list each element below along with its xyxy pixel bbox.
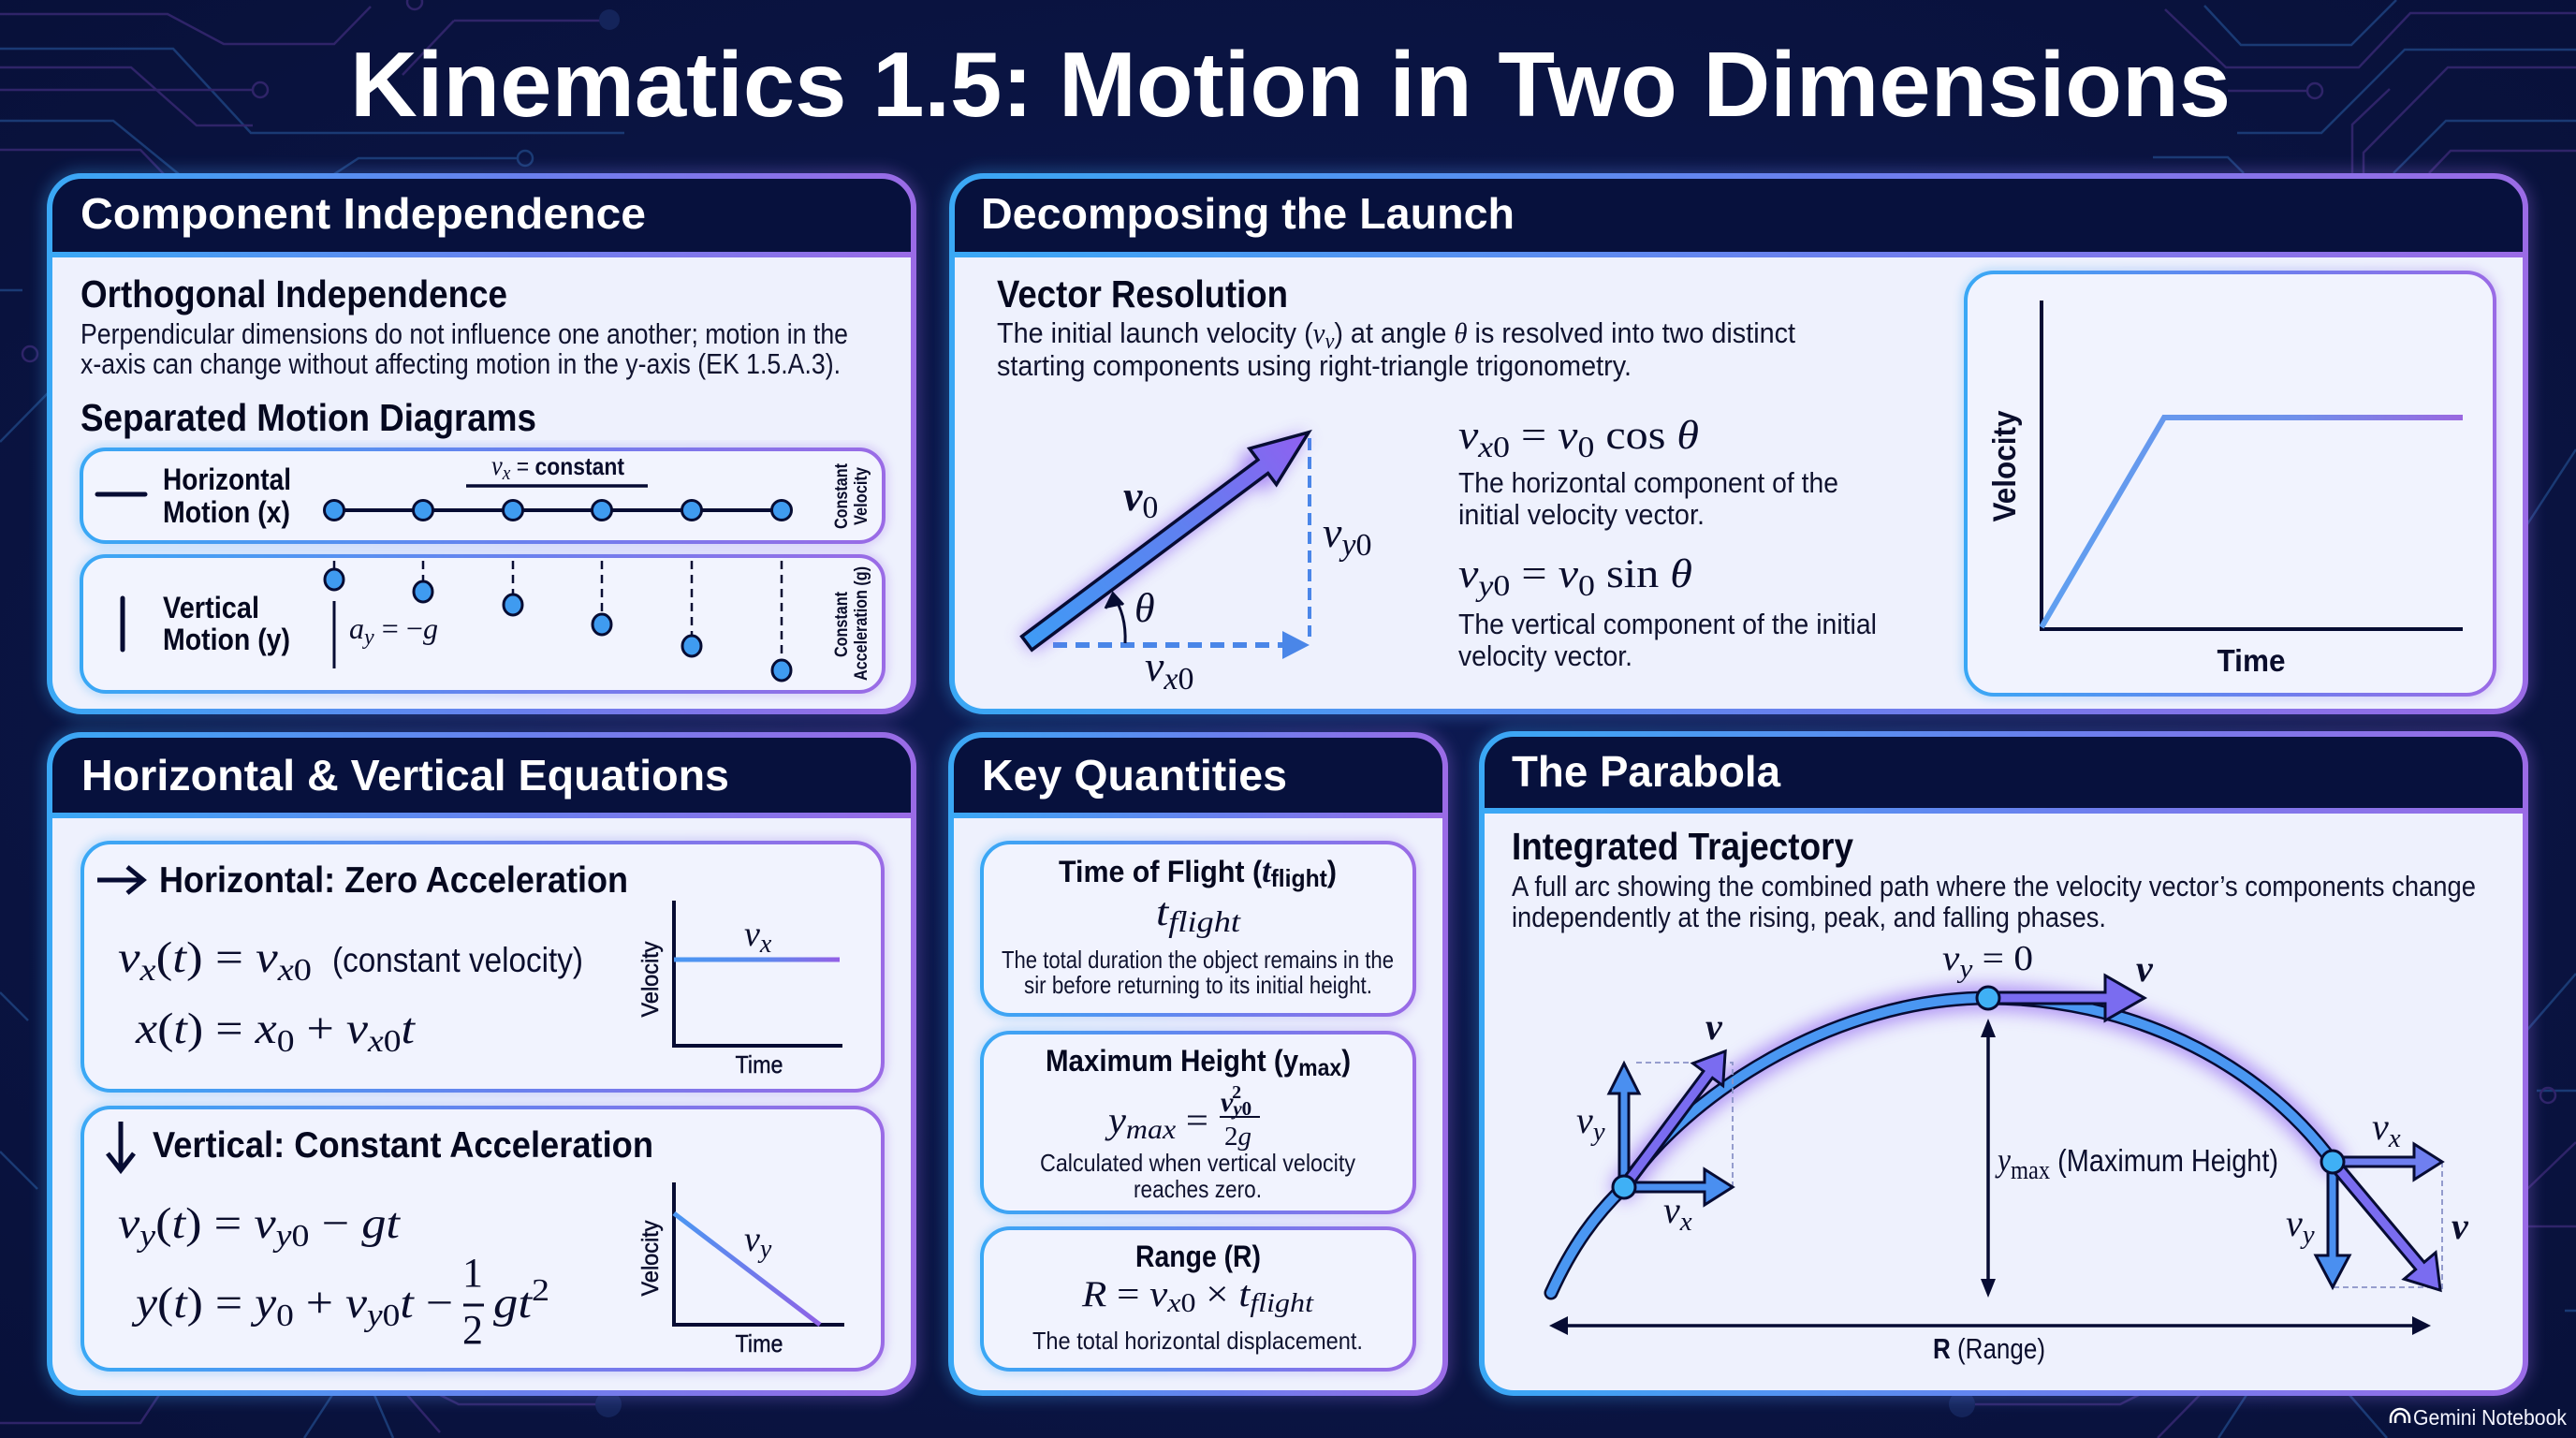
arrow: range (1549, 1316, 2431, 1335)
label: constant acceleration: Constant (832, 591, 852, 657)
label: vx falling: v (2372, 1106, 2389, 1148)
equation: y(t): y(t) = y (136, 1279, 274, 1328)
label: range: R (Range) (1933, 1332, 2045, 1365)
equation: vx(t): x (139, 953, 156, 988)
label: vy0: 0 (1356, 528, 1372, 563)
chart: constant vx: x (759, 930, 772, 959)
label: maximum height: y (1995, 1141, 2011, 1179)
equation: x(t): + (295, 1005, 346, 1053)
text block: orthogonal independence description (80, 317, 848, 380)
text block: range description: The total horizontal displacement. (1032, 1327, 1363, 1355)
equation: ay = -g: a (349, 611, 364, 645)
label: v rising: v (1705, 1005, 1723, 1048)
panel: Component Independence (50, 176, 914, 712)
chart: constant vx: v (744, 915, 760, 954)
equation: range: t (1238, 1274, 1249, 1314)
equation: vx0: 0 (1493, 430, 1510, 463)
label: horizontal motion: Motion (x) (163, 495, 290, 529)
label: v peak: v (2136, 947, 2154, 990)
label: theta: θ (1134, 585, 1155, 631)
heading: horizontal zero acceleration: Horizontal: Zero Acceleration (159, 860, 628, 901)
equation: vx(t): ( (156, 933, 172, 982)
equation: vx constant: x (502, 461, 511, 484)
equation: y(t): v (345, 1279, 365, 1328)
text block: time of flight description (1002, 946, 1394, 999)
text block: trajectory description: independently at the rising, peak, and falling phases. (1512, 901, 2106, 933)
text block: vector resolution description (997, 316, 1795, 382)
equation: vy0: v (1458, 552, 1476, 596)
heading: time of flight: ) (1327, 855, 1337, 888)
heading: vertical constant acceleration: Vertical: Constant Acceleration (153, 1125, 653, 1166)
text block: vx0 description: The horizontal component of the (1458, 466, 1838, 499)
text block: vy0 description (1458, 608, 1877, 672)
title: Kinematics 1.5: Motion in Two Dimensions (350, 33, 2231, 136)
equation: x(t): 0 (277, 1024, 295, 1059)
equation: vy0: sin (1595, 552, 1670, 596)
equation: y(t): gt (493, 1279, 528, 1328)
card: time of flight (982, 843, 1414, 1015)
text block: trajectory description (1512, 870, 2476, 933)
equation: y(t): 2 (462, 1307, 483, 1353)
text block: vx0 description (1458, 466, 1838, 531)
motion dots: increasing spacing (325, 561, 791, 681)
chart: decreasing vy: y (757, 1235, 772, 1264)
equation: vx0: v (1458, 414, 1476, 458)
heading: maximum height: Maximum Height (y (1046, 1044, 1320, 1078)
equation: vy0: 0 (1578, 568, 1595, 602)
text block: time of flight description: The total duration the object remains in the (1002, 946, 1394, 974)
label: vy = 0: = 0 (1972, 939, 2033, 978)
label: v falling: v (2452, 1205, 2469, 1247)
heading: Orthogonal Independence: Orthogonal Independence (80, 272, 507, 315)
dashed component: vy0 (1308, 438, 1311, 637)
heading: The Parabola: The Parabola (1512, 747, 1780, 796)
peak vector (1977, 976, 2144, 1020)
equation: y max: 2 (1232, 1082, 1241, 1103)
equation: y max: y (1108, 1099, 1125, 1141)
label: vy falling: y (2300, 1220, 2315, 1250)
label: vx rising: x (1679, 1207, 1692, 1237)
text block: vector resolution description: starting components using right-triangle trigonometry. (997, 349, 1632, 382)
equation: y(t): − (414, 1279, 453, 1328)
equation: vx0: 0 (1577, 430, 1594, 463)
label: constant velocity (832, 462, 871, 529)
heading: time of flight: Time of Flight (t (1059, 852, 1273, 889)
label: v0: 0 (1142, 491, 1158, 525)
panel: Horizontal & Vertical Equations (50, 735, 914, 1393)
label: vx falling: x (2388, 1123, 2401, 1153)
text block: vector resolution description: v (1325, 330, 1335, 354)
label: constant acceleration (832, 566, 871, 681)
icon: right arrow (97, 867, 143, 893)
chart: constant vx: Time (736, 1050, 783, 1078)
equation: vy(t): y (137, 1219, 156, 1254)
equation: ay = -g: = − (374, 611, 423, 645)
equation: y max: v (1221, 1087, 1233, 1118)
text block: trajectory description: A full arc showing the combined path where the velocity vector’s components change (1512, 870, 2476, 902)
equation: range: flight (1250, 1288, 1314, 1318)
diagram: vertical motion (81, 556, 884, 692)
equation: vx(t) (118, 933, 583, 988)
equation: range: 0 (1181, 1288, 1196, 1318)
icon: horizontal line (97, 492, 145, 496)
label: maximum height: max (2011, 1156, 2050, 1185)
equation: t flight: flight (1168, 904, 1241, 938)
equation: vx0: v (1558, 414, 1575, 458)
thin guides (1636, 1063, 2442, 1290)
text block: vector resolution description: The initial launch velocity (v (997, 316, 1338, 349)
label: constant velocity: Constant (832, 462, 852, 529)
equation: vy(t): 0 (291, 1219, 309, 1254)
equation: x(t): v (346, 1005, 366, 1053)
arrow: maximum height (1981, 1019, 1996, 1298)
text block: maximum height description: Calculated when vertical velocity (1040, 1149, 1355, 1177)
diagram: horizontal motion (81, 449, 884, 542)
text block: time of flight description: sir before returning to its initial height. (1024, 971, 1372, 999)
equation: ay = -g (334, 601, 438, 668)
equation: vy0: v (1559, 552, 1576, 596)
label: horizontal motion: Horizontal (163, 462, 291, 496)
label: vy0: v (1323, 508, 1341, 556)
text block: vy0 description: velocity vector. (1458, 639, 1632, 672)
angle arc (1105, 594, 1125, 643)
label: vertical motion: Vertical (163, 591, 259, 624)
equation: vx0: cos (1594, 414, 1676, 458)
equation: y(t): 1 (462, 1250, 483, 1296)
equation: vx(t): 0 (294, 953, 312, 988)
equation: vy0: θ (1670, 552, 1690, 596)
equation: vx constant: = (510, 452, 534, 480)
equation: y(t): + (294, 1279, 345, 1328)
equation: x(t): x(t) = x (136, 1005, 274, 1053)
equation: vx(t): x (277, 953, 294, 988)
heading: Integrated Trajectory: Integrated Trajectory (1512, 825, 1853, 868)
icon: down arrow (108, 1122, 134, 1170)
equation: vy0: = (1510, 552, 1559, 596)
heading: Decomposing the Launch: Decomposing the Launch (981, 189, 1515, 238)
equation: vy(t): v (118, 1199, 138, 1248)
label: maximum height: (Maximum Height) (2050, 1143, 2278, 1178)
equation: y max: = (1176, 1099, 1208, 1141)
equation: x(t): t (402, 1005, 416, 1053)
equation: vy(t): t) = v (172, 1199, 273, 1248)
dashed arrow: vx0 (1053, 631, 1310, 659)
curve: parabolic path (1551, 998, 2333, 1293)
card: horizontal zero acceleration (82, 843, 883, 1091)
panel: Key Quantities (951, 735, 1445, 1393)
equation: vy(t): − (309, 1199, 361, 1248)
equation: range: × (1196, 1274, 1238, 1314)
icon: vertical line (120, 598, 125, 650)
axis label: velocity: Velocity (1987, 410, 2023, 522)
equation: x(t): 0 (384, 1024, 402, 1059)
equation: range: R = v (1082, 1274, 1165, 1314)
text block: vx0 description: initial velocity vector. (1458, 498, 1705, 531)
equation: vx0: = (1510, 414, 1558, 458)
vector diagram: launch velocity resolution (1013, 414, 1372, 697)
equation: vy0: 0 (1493, 568, 1510, 602)
text block: maximum height description (1040, 1149, 1355, 1203)
text block: vy0 description: The vertical component of the initial (1458, 608, 1877, 640)
equation: y max: y (1230, 1097, 1242, 1120)
label: horizontal motion (163, 462, 291, 529)
text block: vector resolution description: ) at angle (1334, 316, 1454, 349)
chart: decreasing vy: Velocity (637, 1220, 664, 1296)
heading: Key Quantities: Key Quantities (982, 751, 1287, 800)
label: vy0: y (1339, 528, 1356, 563)
text block: orthogonal independence description: Perpendicular dimensions do not influence one another; motion in the (80, 317, 848, 350)
chart: decreasing vy: v (744, 1220, 760, 1259)
falling vectors (2316, 1144, 2456, 1303)
equation: vx0: x (1477, 430, 1493, 463)
watermark: Gemini Notebook: Gemini Notebook (2413, 1405, 2567, 1430)
equation: ay = -g: y (362, 625, 374, 650)
label: vx0: v (1145, 642, 1164, 690)
equation: vx constant: v (491, 450, 503, 481)
label: vx0: x (1163, 662, 1178, 697)
heading: range: Range (R) (1135, 1240, 1261, 1273)
motion dots: constant spacing (324, 500, 792, 521)
chart: decreasing vy (637, 1182, 844, 1357)
equation: vx0: θ (1676, 414, 1697, 458)
axis label: time: Time (2217, 643, 2286, 678)
label: vy falling: v (2286, 1202, 2303, 1244)
label: vy rising: v (1576, 1099, 1593, 1141)
trajectory diagram (1549, 939, 2469, 1365)
equation: vy0: y (1475, 568, 1494, 602)
equation: ay = -g: g (423, 611, 438, 645)
equation: vy(t): y (272, 1219, 293, 1254)
heading: maximum height: ) (1341, 1044, 1351, 1078)
heading: maximum height: max (1298, 1055, 1341, 1081)
card: vertical constant acceleration (82, 1108, 883, 1370)
equation: vx(t): v (118, 933, 138, 982)
heading: Horizontal & Vertical Equations: Horizontal & Vertical Equations (81, 751, 729, 800)
equation: y(t): 2 (532, 1273, 549, 1308)
rising vectors (1609, 1040, 1740, 1205)
label: vertical motion: Motion (y) (163, 623, 290, 656)
equation: vx constant (466, 450, 648, 486)
equation: y(t): t (400, 1279, 415, 1328)
label: constant velocity: Velocity (852, 467, 871, 525)
equation: vy(t): gt (361, 1199, 396, 1248)
equation: y(t): 0 (276, 1299, 294, 1333)
chart: velocity vs time (1966, 272, 2495, 695)
equation: vy(t): ( (155, 1199, 172, 1248)
panel: The Parabola (1482, 734, 2525, 1393)
equation: y(t): y (364, 1299, 384, 1333)
text block: orthogonal independence description: x-axis can change without affecting motion in the y-axis (EK 1.5.A.3). (80, 347, 841, 380)
chart: decreasing vy: Time (736, 1329, 783, 1357)
label: vertical motion (163, 591, 290, 656)
label: vy rising: y (1590, 1117, 1605, 1147)
equation: range: x (1166, 1288, 1181, 1318)
text block: maximum height description: reaches zero. (1134, 1175, 1262, 1203)
chart: constant vx: Velocity (637, 941, 664, 1017)
label: constant acceleration: Acceleration (g) (852, 566, 871, 681)
equation: vx constant: constant (534, 452, 637, 480)
equation: y max (1105, 1082, 1260, 1152)
equation: y max: 0 (1242, 1097, 1251, 1120)
label: vx rising: v (1663, 1189, 1680, 1231)
label: vy = 0: y (1956, 954, 1972, 984)
heading: Component Independence: Component Independence (80, 189, 646, 238)
label: vy = 0: v (1942, 939, 1958, 978)
card: maximum height (982, 1033, 1414, 1212)
text block: vector resolution description: θ is resolved into two distinct (1454, 316, 1821, 349)
label: vx0: 0 (1178, 662, 1194, 697)
equation: y max: 2g (1224, 1122, 1251, 1152)
arrow: v0 (1013, 414, 1323, 662)
equation: vx(t): t) = v (172, 933, 275, 982)
equation: vx(t): (constant velocity) (332, 941, 583, 979)
equation: t flight: t (1156, 891, 1167, 934)
equation: y(t) (132, 1250, 549, 1353)
equation: y(t): 0 (383, 1299, 400, 1333)
card: range (982, 1228, 1414, 1370)
equation: x(t): x (367, 1024, 384, 1059)
heading: Separated Motion Diagrams: Separated Motion Diagrams (80, 396, 536, 439)
equation: y max: max (1126, 1114, 1177, 1145)
chart: constant vx (637, 901, 842, 1078)
label: v0: v (1123, 472, 1142, 520)
panel: Decomposing the Launch (952, 176, 2525, 712)
heading: Vector Resolution: Vector Resolution (997, 272, 1288, 315)
heading: time of flight: flight (1271, 864, 1327, 892)
